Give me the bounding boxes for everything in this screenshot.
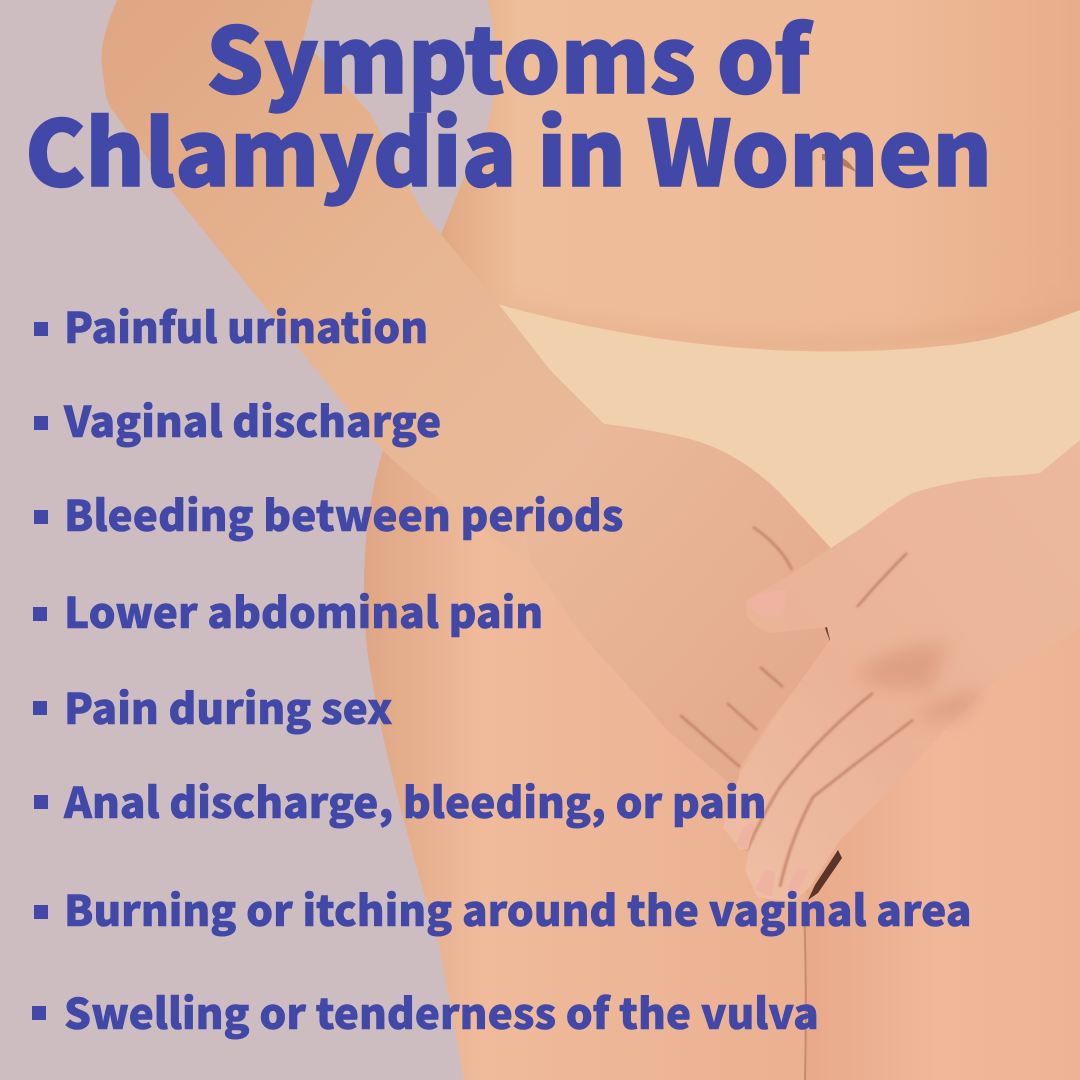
belly shading above waistband — [500, 300, 1080, 353]
symptom: swelling or tenderness: Swelling or tenderness of the vulva — [64, 981, 819, 1042]
torso — [440, 0, 1080, 420]
knuckle shading — [860, 644, 985, 720]
dark crease between fingers and thigh — [808, 850, 842, 900]
symptom: painful urination: Painful urination — [64, 295, 428, 356]
symptom: lower abdominal pain: Lower abdominal pain — [64, 580, 543, 641]
navel — [822, 154, 856, 172]
right thigh — [806, 600, 1080, 1080]
title: Chlamydia in Women — [25, 82, 992, 213]
symptom: bleeding between periods: Bleeding between periods — [64, 483, 623, 544]
left thigh — [364, 445, 950, 1080]
title — [25, 0, 992, 213]
dark gap under thumb — [825, 606, 855, 655]
underwear — [385, 302, 1080, 560]
symptom: anal discharge, bleeding, or pain: Anal discharge, bleeding, or pain — [64, 770, 766, 831]
finger nails — [735, 590, 808, 897]
symptom: pain during sex: Pain during sex — [64, 676, 392, 737]
arm — [102, 0, 640, 570]
right hand — [723, 440, 1080, 902]
symptom: burning or itching: Burning or itching around the vaginal area — [64, 878, 972, 939]
left hand — [520, 420, 835, 790]
symptom: vaginal discharge: Vaginal discharge — [64, 389, 441, 450]
crease between thighs — [804, 905, 806, 1080]
finger and knuckle lines — [680, 527, 913, 887]
